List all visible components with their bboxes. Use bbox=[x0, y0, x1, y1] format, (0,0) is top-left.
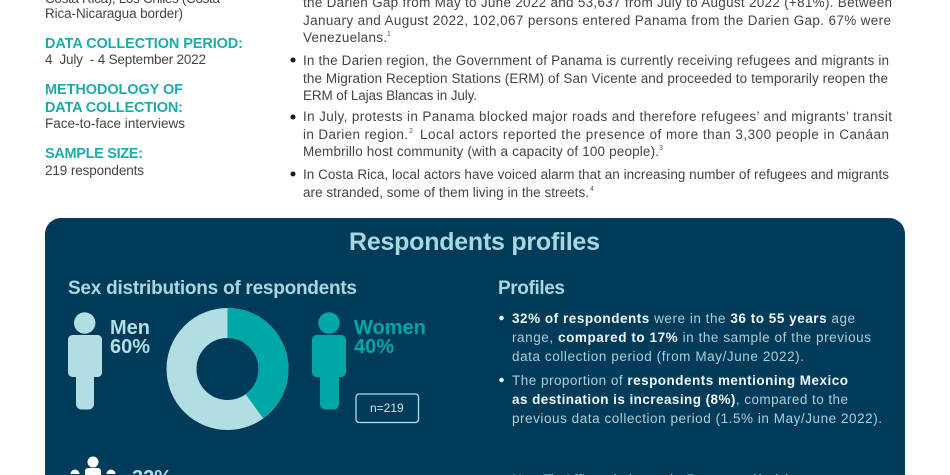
label: men 60%: Men bbox=[110, 317, 150, 339]
bullet text: Costa Rica: 4 bbox=[590, 186, 594, 193]
label: women 40%: 40% bbox=[354, 336, 394, 358]
heading: respondents profiles: Respondents profiles bbox=[349, 228, 600, 256]
text: sample size: 219 respondents bbox=[45, 163, 144, 178]
bullet text: reception stations: ERM of Lajas Blancas in July. bbox=[303, 88, 477, 103]
text: location: Rica-Nicaragua border) bbox=[45, 6, 183, 21]
icon: group of people bbox=[70, 456, 116, 475]
text block: situation overview bbox=[290, 0, 892, 200]
bullet text: protests: Membrillo host community (with a capacity of 100 people). bbox=[303, 144, 659, 159]
bullet text: protests: 2 bbox=[409, 128, 413, 135]
bullet text: Costa Rica: are stranded, some of them living in the streets. bbox=[303, 185, 589, 200]
text: period dates: 4 July - 4 September 2022 bbox=[45, 52, 206, 67]
bullet text: Mexico destination: The proportion of respondents mentioning Mexico bbox=[512, 373, 848, 388]
bullet text: Darien Gap arrivals: January and August 2022, 102,067 persons entered Panama from the Darien Gap. 67% were bbox=[303, 13, 891, 28]
bullet text: protests: in Darien region. bbox=[303, 127, 408, 142]
heading: sex distributions: Sex distributions of respondents bbox=[68, 278, 357, 299]
bullet text: protests: Local actors reported the presence of more than 3,300 people in Canáan bbox=[420, 127, 889, 142]
donut chart: sex distribution bbox=[182, 323, 274, 415]
bullet text: reception stations bbox=[290, 53, 889, 103]
label: men 60% bbox=[110, 317, 150, 358]
text: location bbox=[45, 0, 220, 21]
callout: sample size n=219 bbox=[356, 394, 418, 422]
bullet text: Darien Gap arrivals: Venezuelans. bbox=[303, 30, 387, 45]
heading: methodology of data collection: METHODOLOGY OF bbox=[45, 82, 183, 98]
icon: woman bbox=[312, 312, 346, 410]
bullet text: age range: data collection period (from May/June 2022). bbox=[512, 349, 804, 364]
bullet text: protests: In July, protests in Panama blocked major roads and therefore refugees’ and migrants’ transit bbox=[303, 109, 892, 124]
panel: respondents profiles bbox=[45, 218, 905, 475]
bullet text: age range bbox=[499, 311, 871, 364]
bullet text: Mexico destination bbox=[499, 373, 882, 426]
icon: man bbox=[68, 312, 102, 410]
label: men 60%: 60% bbox=[110, 336, 150, 358]
bullet text: Mexico destination: as destination is increasing (8%), compared to the bbox=[512, 392, 848, 407]
bullet text: reception stations: In the Darien region, the Government of Panama is currently receiving refugees and migrants in bbox=[303, 53, 889, 68]
bullet text: Costa Rica bbox=[290, 167, 889, 200]
callout: sample size n=219: n=219 bbox=[370, 401, 404, 415]
bullet text: age range: range, compared to 17% in the sample of the previous bbox=[512, 330, 871, 345]
bullet text: age range: 32% of respondents were in the 36 to 55 years age bbox=[512, 311, 855, 326]
bullet text: protests: 3 bbox=[659, 145, 663, 152]
bullet text: Costa Rica: In Costa Rica, local actors have voiced alarm that an increasing number of refugees and migrants bbox=[303, 167, 889, 182]
bullet text: reception stations: the Migration Reception Stations (ERM) of San Vicente and proceeded to temporarily reopen the bbox=[303, 71, 888, 86]
heading: sample size: SAMPLE SIZE: bbox=[45, 146, 143, 162]
label: women 40%: Women bbox=[354, 317, 426, 339]
bullet text: Darien Gap arrivals bbox=[303, 0, 892, 45]
heading: data collection period: DATA COLLECTION PERIOD: bbox=[45, 36, 243, 52]
bullet text: Mexico destination: previous data collection period (1.5% in May/June 2022). bbox=[512, 411, 882, 426]
heading: methodology of data collection: DATA COLLECTION: bbox=[45, 100, 183, 116]
heading: profiles: Profiles bbox=[498, 278, 565, 299]
bullet text: Darien Gap arrivals: 1 bbox=[387, 31, 391, 38]
heading: methodology of data collection bbox=[45, 82, 183, 116]
bullet text: protests bbox=[290, 109, 892, 159]
label: women 40% bbox=[354, 317, 426, 358]
text: methodology: Face-to-face interviews bbox=[45, 116, 185, 131]
panel: survey details bbox=[45, 0, 243, 178]
